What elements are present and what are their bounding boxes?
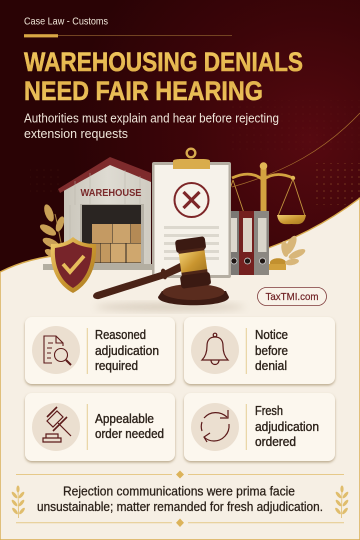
footer conclusion text: Rejection communications were prima facie <box>63 484 295 498</box>
label text: adjudication <box>255 420 319 434</box>
footer conclusion text: unsustainable; matter remanded for fresh adjudication. <box>37 500 323 514</box>
icon: left laurel sprig <box>38 203 66 261</box>
label text <box>95 412 164 441</box>
warehouse sign: WAREHOUSE <box>80 188 142 199</box>
icon: right laurel sprig <box>280 234 307 266</box>
label text <box>255 328 288 373</box>
icon: X in circle <box>174 183 208 217</box>
footer conclusion text <box>37 484 323 514</box>
icon: refresh arrows <box>201 410 229 442</box>
warehouse door with boxes <box>80 204 144 264</box>
title: WAREHOUSING DENIALS <box>24 47 303 77</box>
subtitle <box>24 110 279 141</box>
TaxTMI badge: TaxTMI.com <box>266 291 319 303</box>
panel: fresh adjudication <box>184 393 335 461</box>
label text: before <box>255 344 288 358</box>
illustration: shield with check <box>51 237 96 293</box>
illustration: warehouse <box>43 157 153 270</box>
gavel head <box>175 236 211 289</box>
label text: adjudication <box>95 344 159 358</box>
thin gold arc <box>232 113 360 187</box>
label text: Appealable <box>95 412 154 426</box>
panel: appealable order <box>25 393 175 461</box>
label text: ordered <box>255 435 296 449</box>
decorative dots <box>30 100 360 205</box>
subtitle: Authorities must explain and hear before rejecting <box>24 110 279 126</box>
label text: order needed <box>95 427 164 441</box>
footer rules with diamonds <box>16 470 344 527</box>
label text: Reasoned <box>95 328 146 342</box>
gavel sound block <box>158 284 229 305</box>
label text <box>95 328 159 373</box>
label text <box>255 404 319 449</box>
illustration: clipboard with rejection mark <box>152 149 231 278</box>
label text: Fresh <box>255 404 283 418</box>
cream lower panel <box>0 198 360 540</box>
illustration: scales of justice <box>221 162 306 270</box>
TaxTMI badge <box>258 288 326 306</box>
gavel handle <box>93 262 184 299</box>
panel: reasoned adjudication <box>25 317 175 384</box>
label text: Notice <box>255 328 288 342</box>
icon: footer left wheat <box>11 486 26 518</box>
kicker: category label: Case Law - Customs <box>24 16 108 28</box>
illustration: binders <box>231 211 269 275</box>
illustration: gavel <box>93 236 245 310</box>
icon: footer right wheat <box>334 486 349 518</box>
icon: document with magnifier <box>44 336 71 365</box>
panel: notice before denial <box>184 317 335 384</box>
kicker rule <box>24 34 232 37</box>
label text: required <box>95 359 138 373</box>
icon: gavel outline <box>43 407 71 442</box>
title: NEED FAIR HEARING <box>24 76 263 106</box>
icon: bell <box>202 333 228 364</box>
title <box>24 47 303 106</box>
label text: denial <box>255 359 287 373</box>
subtitle: extension requests <box>24 126 128 141</box>
background: dark maroon header <box>0 0 360 300</box>
